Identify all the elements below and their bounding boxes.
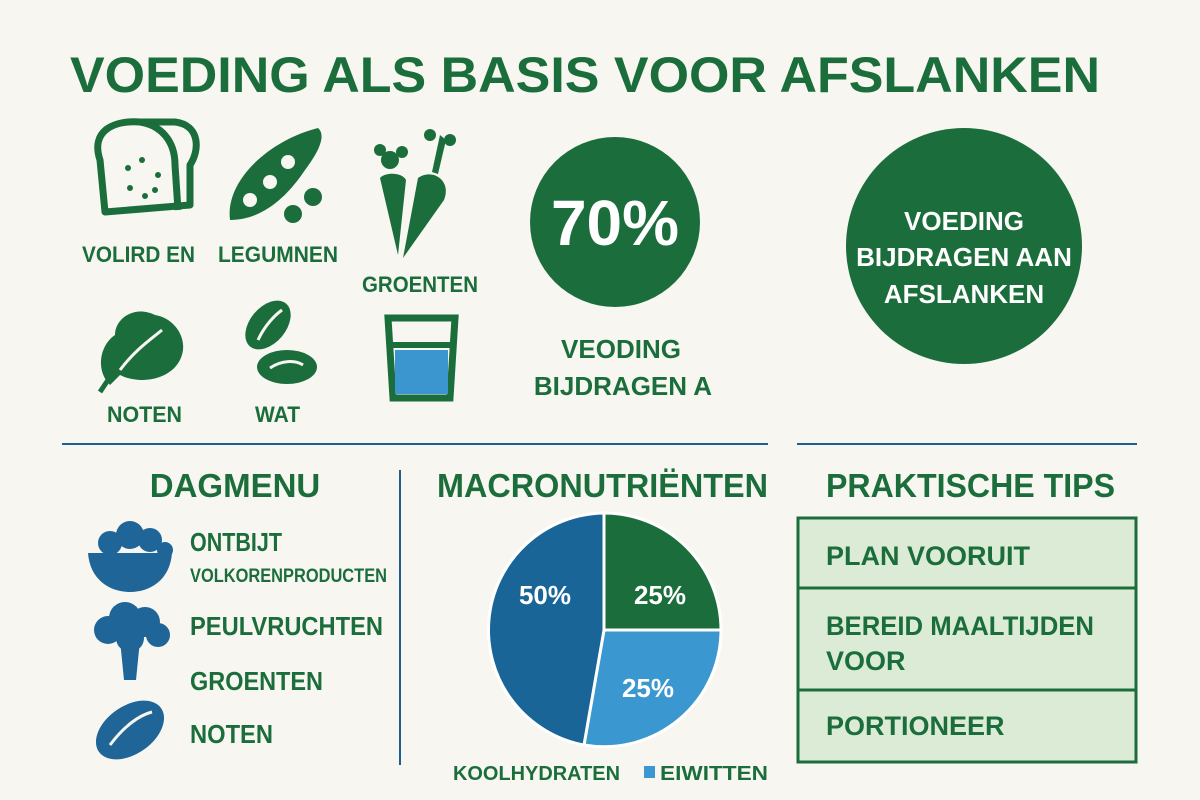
panel: dagmenu [85, 467, 387, 771]
pie chart: 50% [519, 580, 571, 610]
stat circle: 70%: 70% [551, 187, 679, 259]
title: VOEDING ALS BASIS VOOR AFSLANKEN [70, 47, 1100, 103]
label: legumnen: LEGUMNEN [218, 242, 338, 267]
label: wat: WAT [255, 402, 301, 427]
legend: KOOLHYDRATEN [453, 763, 620, 785]
legend [453, 763, 768, 785]
text: groenten: GROENTEN [190, 666, 323, 696]
tips box: VOOR [826, 646, 906, 676]
heading: dagmenu: DAGMENU [150, 467, 320, 504]
tips box: BEREID MAALTIJDEN [826, 611, 1094, 641]
label: groenten: GROENTEN [362, 272, 478, 297]
stat circle: 70% [530, 137, 700, 307]
big circle callout: AFSLANKEN [884, 279, 1044, 309]
icon: bread [98, 122, 196, 212]
icon: pea pod [230, 128, 322, 223]
heading: MACRONUTRIËNTEN [437, 467, 768, 504]
text: noten: NOTEN [190, 719, 273, 749]
big circle callout: VOEDING [904, 206, 1024, 236]
stat caption: VEODING [561, 334, 681, 364]
icon grid: food groups [82, 122, 478, 427]
tips box [798, 518, 1136, 762]
icon: nut [85, 689, 175, 771]
panel: praktische tips [798, 467, 1136, 762]
icon: spinach leaf [100, 312, 183, 392]
heading: PRAKTISCHE TIPS [826, 467, 1115, 504]
text: ontbijt: ONTBIJT [190, 527, 282, 557]
icon: glass of water [388, 318, 455, 398]
stat caption [534, 334, 712, 401]
pie chart [488, 513, 721, 747]
text: volkorenproducten: VOLKORENPRODUCTEN [190, 566, 387, 587]
icon: nuts [236, 292, 317, 384]
label: volird en: VOLIRD EN [82, 242, 195, 267]
icon: bowl [88, 521, 173, 592]
panel: macronutrienten [437, 467, 768, 785]
legend: EIWITTEN [660, 763, 768, 785]
tips box: PLAN VOORUIT [826, 541, 1031, 571]
pie chart: 25% [622, 673, 674, 703]
label: noten: NOTEN [107, 402, 182, 427]
tips box: PORTIONEER [826, 711, 1005, 741]
big circle callout [846, 128, 1082, 364]
text: peulvruchten: PEULVRUCHTEN [190, 611, 383, 641]
icon: broccoli [94, 602, 170, 680]
pie chart: 25% [634, 580, 686, 610]
big circle callout: BIJDRAGEN AAN [856, 242, 1072, 272]
stat caption: BIJDRAGEN A [534, 371, 712, 401]
icon: carrots [374, 129, 456, 258]
